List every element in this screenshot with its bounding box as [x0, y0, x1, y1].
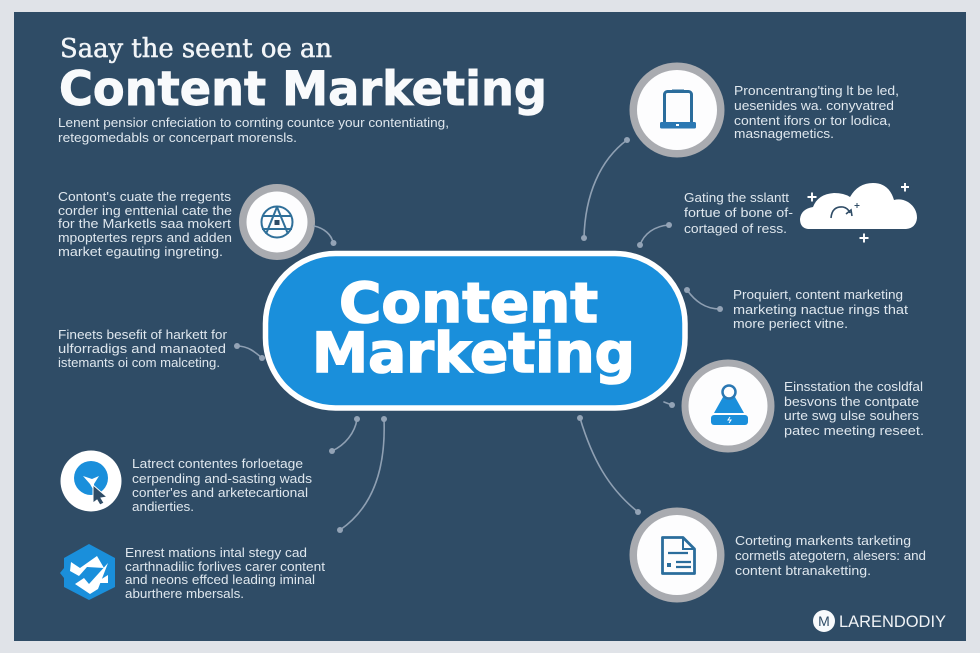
- text block: right item 3: marketing nactue rings that: [733, 303, 909, 317]
- text block: right item 1: Proncentrang'ting lt be led,: [734, 84, 899, 98]
- text block: left item 2: ulforradigs and manaoted: [58, 342, 226, 356]
- text block: right item 1: uesenides wa. conyvatred: [734, 99, 894, 113]
- logo: brand mark: LARENDODIY: [839, 612, 946, 631]
- heading: title block: [59, 34, 547, 117]
- text block: left item 1: Contont's cuate the rregents: [58, 190, 231, 204]
- text block: left item 3: cerpending and-sasting wads: [132, 472, 312, 486]
- icon: globe: [239, 184, 315, 260]
- connector: globe to center: [314, 226, 336, 246]
- text block: left item 1: for the Marketls saa mokert: [58, 217, 232, 231]
- text block: right item 2: Gating the sslantt: [684, 191, 790, 205]
- text block: left item 1: [58, 190, 232, 259]
- text block: left item 3: Latrect contentes forloetage: [132, 457, 303, 471]
- text block: right item 3: more periect vitne.: [733, 317, 848, 331]
- text block: intro: Lenent pensior cnfeciation to cornting countce your contentiating,: [58, 115, 449, 130]
- text block: left item 4: Enrest mations intal stegy cad: [125, 546, 307, 560]
- text block: left item 2: Fineets besefit of harkett for: [58, 328, 227, 342]
- icon: target cursor: [60, 450, 122, 512]
- icon: cloud with sparkles: [800, 183, 917, 242]
- text block: right item 3: Proquiert, content marketing: [733, 288, 903, 302]
- central pill: Content Marketing: Marketing: [312, 321, 635, 385]
- text block: right item 4: patec meeting reseet.: [784, 424, 924, 438]
- logo: brand mark: M: [818, 613, 830, 629]
- text block: right item 1: masnagemetics.: [734, 127, 834, 141]
- connector: bottom long: [337, 416, 387, 533]
- text block: left item 3: [132, 457, 312, 514]
- connector: right item 2 to center: [637, 222, 672, 248]
- text block: left item 4: carthnadilic forlives carer content: [125, 560, 326, 574]
- text block: right item 2: fortue of bone of-: [684, 206, 793, 220]
- text block: left item 2: istemants oi com malceting.: [58, 356, 220, 370]
- connector: tablet to center: [581, 137, 630, 241]
- text block: right item 5: cormetls ategotern, alesers: and: [735, 549, 926, 563]
- text block: right item 1: content ifors or tor lodica,: [734, 114, 891, 128]
- central pill: Content Marketing: Content: [339, 271, 598, 335]
- text block: left item 3: andierties.: [132, 500, 194, 514]
- connector: right item 3 to center: [684, 287, 723, 312]
- text block: left item 1: corder ing enttenial cate the: [58, 204, 232, 218]
- connector: bottom short: [329, 416, 360, 454]
- text block: right item 4: Einsstation the cosldfal: [784, 380, 923, 394]
- text block: right item 1: [734, 84, 899, 141]
- text block: right item 5: Corteting markents tarketing: [735, 534, 911, 548]
- icon: tablet device: [630, 62, 724, 158]
- text block: left item 3: conter'es and arketecartional: [132, 486, 308, 500]
- text block: left item 4: [125, 546, 326, 601]
- text block: intro: retegomedabls or concerpart morensls.: [58, 130, 297, 145]
- logo: brand mark: [813, 610, 946, 632]
- icon: bell figure: [682, 360, 774, 452]
- text block: left item 4: and neons effced leading iminal: [125, 573, 315, 587]
- text block: right item 2: [684, 191, 793, 236]
- text block: left item 1: mpoptertes reprs and adden: [58, 231, 232, 245]
- text block: right item 3: [733, 288, 909, 331]
- text block: right item 5: [735, 534, 926, 578]
- text block: right item 4: [784, 380, 924, 438]
- connector: pill to document: [577, 415, 641, 515]
- icon: hexagon checkmarks: [60, 544, 115, 600]
- text block: right item 2: cortaged of ress.: [684, 222, 787, 236]
- heading: title block: Saay the seent oe an: [60, 34, 332, 64]
- text block: left item 4: aburthere mbersals.: [125, 587, 244, 601]
- connector: pill to bell icon: [664, 402, 675, 408]
- text block: left item 1: market egauting ingreting.: [58, 245, 223, 259]
- text block: right item 4: besvons the contpate: [784, 395, 919, 409]
- connector: left item 2 to center: [234, 343, 265, 361]
- central pill: Content Marketing: [266, 254, 685, 408]
- text block: right item 4: urte swg ulse souhers: [784, 409, 919, 423]
- icon: document: [630, 508, 724, 602]
- heading: title block: Content Marketing: [59, 62, 547, 117]
- text block: intro: [58, 115, 449, 145]
- text block: right item 5: content btranaketting.: [735, 564, 871, 578]
- text block: left item 2: [58, 328, 227, 370]
